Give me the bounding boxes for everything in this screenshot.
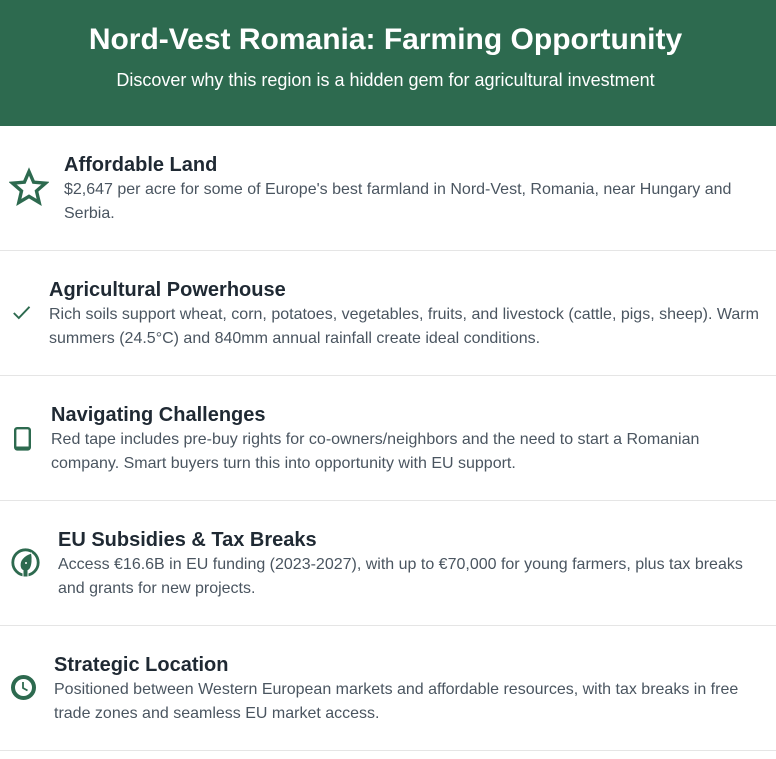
heading: EU Subsidies & Tax Breaks (58, 529, 317, 551)
panel: agricultural powerhouse (0, 251, 776, 376)
icon: check mark (13, 306, 30, 320)
text block: and grants for new projects. (58, 580, 255, 597)
text block (64, 181, 731, 222)
text block: summers (24.5°C) and 840mm annual rainfall create ideal conditions. (49, 330, 540, 347)
icon: star (9, 167, 49, 206)
text block: Red tape includes pre-buy rights for co-owners/neighbors and the need to start a Romanian (51, 431, 699, 448)
heading: Affordable Land (64, 154, 217, 176)
text block (51, 431, 699, 472)
text block: Access €16.6B in EU funding (2023-2027), with up to €70,000 for young farmers, plus tax breaks (58, 556, 743, 573)
heading: Strategic Location (54, 654, 228, 676)
text block: Positioned between Western European markets and affordable resources, with tax breaks in free (54, 681, 738, 698)
panel: strategic location (0, 626, 776, 751)
text block: Serbia. (64, 205, 115, 222)
subtitle: Discover why this region is a hidden gem for agricultural investment (116, 70, 655, 90)
panel: navigating challenges (0, 376, 776, 501)
icon: clock (11, 675, 36, 700)
text block: company. Smart buyers turn this into opportunity with EU support. (51, 455, 516, 472)
text block (54, 681, 738, 722)
heading: Navigating Challenges (51, 404, 266, 426)
panel: EU subsidies (0, 501, 776, 626)
text block (49, 306, 759, 347)
header banner (0, 0, 776, 126)
text block (58, 556, 743, 597)
panel: affordable land (0, 126, 776, 251)
icon: plant in circle (11, 548, 40, 576)
title: Nord-Vest Romania: Farming Opportunity (89, 23, 682, 56)
heading: Agricultural Powerhouse (49, 279, 286, 301)
icon: tablet (14, 427, 31, 451)
text block: Rich soils support wheat, corn, potatoes, vegetables, fruits, and livestock (cattle, pigs, sheep). Warm (49, 306, 759, 323)
text block: $2,647 per acre for some of Europe's best farmland in Nord-Vest, Romania, near Hungary and (64, 181, 731, 198)
text block: trade zones and seamless EU market access. (54, 705, 379, 722)
